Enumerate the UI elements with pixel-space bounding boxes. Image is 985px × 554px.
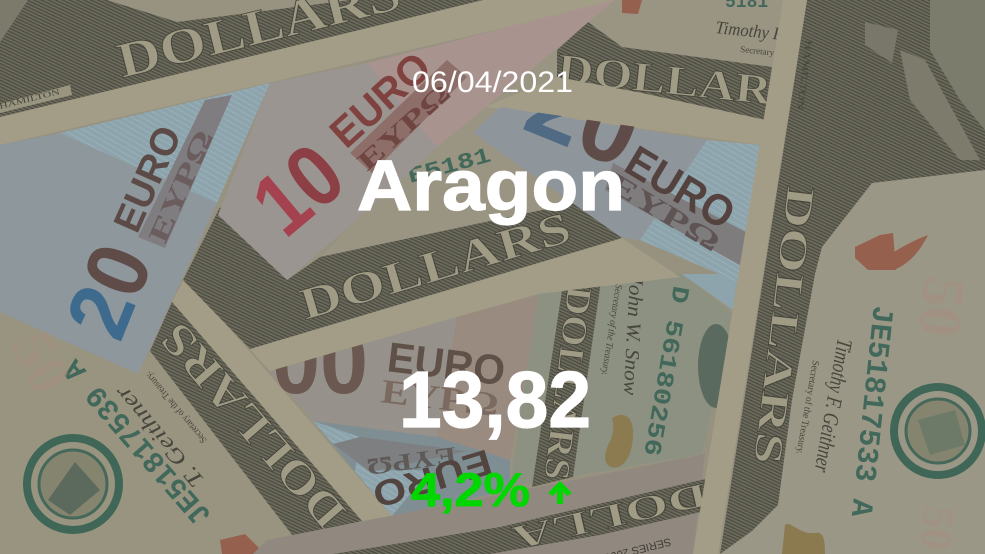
background: top-centre dollar note: Timothy F. (715, 17, 786, 44)
icon: up arrow (548, 481, 572, 504)
background: diagonal dollar strip, lower left: DOLLARS (150, 313, 356, 539)
background: upside-down euro note, blue: EURO (368, 441, 497, 516)
background: 50 euro note: ΕΥΡΩ (379, 373, 501, 424)
background: top-centre dollar note: E5181 (405, 144, 494, 190)
background: green-tinted dollar note, centre right: Secretary of the Treasury. (599, 284, 624, 376)
percentage change: 4,2% (411, 463, 530, 516)
background: green-tinted dollar note, centre right: DOLLARS (536, 284, 600, 482)
background: upside-down euro note, blue: ΕΥΡΩ (365, 441, 458, 479)
background: green-tinted dollar note, centre right: D 56180256 (636, 284, 693, 458)
title: Aragon: Aragon (357, 147, 625, 226)
background: bottom-left dollar note: 50 (0, 320, 85, 404)
background: top-centre dollar note (320, 0, 786, 257)
background: large dollar note, right: Secretary of the Treasury. (794, 359, 821, 455)
background: 10 euro note: 10 (234, 124, 362, 255)
background: large dollar note, right: HAMILTON (795, 40, 814, 111)
background: 20 euro note, right (473, 107, 760, 282)
background: green-tinted dollar note, centre right (510, 274, 738, 487)
background: bottom-left dollar note: JE51817539 A (57, 351, 220, 531)
background: 10 euro note: EURO (321, 43, 440, 157)
background: 10 euro note: ΕΥΡΩ (352, 78, 456, 176)
background: 20 euro note, right: EURO (617, 137, 743, 239)
background: 10 euro note (218, 0, 615, 280)
background: top-centre dollar note: Secretary (740, 44, 775, 58)
background: large dollar note, right: 50 (906, 274, 978, 340)
background: bottom-left dollar note: Secretary of the Treasury. (143, 369, 209, 445)
background: 50 euro note (270, 294, 540, 460)
background: central diagonal dollar strip (183, 202, 680, 371)
background: 20 euro note, right: ΕΥΡΩ (602, 167, 726, 258)
background: central diagonal dollar strip: DOLLARS (294, 202, 576, 330)
background: 20 euro note, left: EURO (106, 120, 190, 239)
background: top-left dollar note (0, 0, 625, 145)
background: 20 euro note, left (0, 83, 270, 374)
background: large dollar note, right (693, 0, 985, 554)
background: large dollar note, right: Timothy F. Geithner (810, 337, 858, 475)
background: upside-down euro note, blue (313, 421, 510, 516)
background: diagonal dollar strip, lower left (150, 277, 392, 539)
background: bottom-left dollar note: T. Geithner (109, 381, 209, 493)
background: 20 euro note, left: ΕΥΡΩ (143, 126, 220, 248)
price value: 13,82 (399, 355, 591, 444)
background: large dollar note, right: DOLLARS (745, 184, 824, 467)
background: green-tinted dollar note, centre right: John W. Snow (619, 275, 647, 396)
background: 20 euro note, left: 20 (48, 231, 171, 351)
background: 50 euro note: EURO (385, 333, 508, 394)
background: bottom dollar note (253, 454, 712, 554)
background: large dollar note, right: 50 (910, 504, 964, 553)
background: large dollar note, right: JE51817533 A (842, 304, 898, 518)
background: 20 euro note, right: 20 (512, 45, 656, 190)
background: 50 euro note: 00 (272, 311, 368, 413)
background: top-centre dollar note: DOLLAR (555, 46, 774, 115)
background: bottom dollar note: DOLLA (508, 475, 712, 554)
date: 06/04/2021 (412, 66, 573, 99)
